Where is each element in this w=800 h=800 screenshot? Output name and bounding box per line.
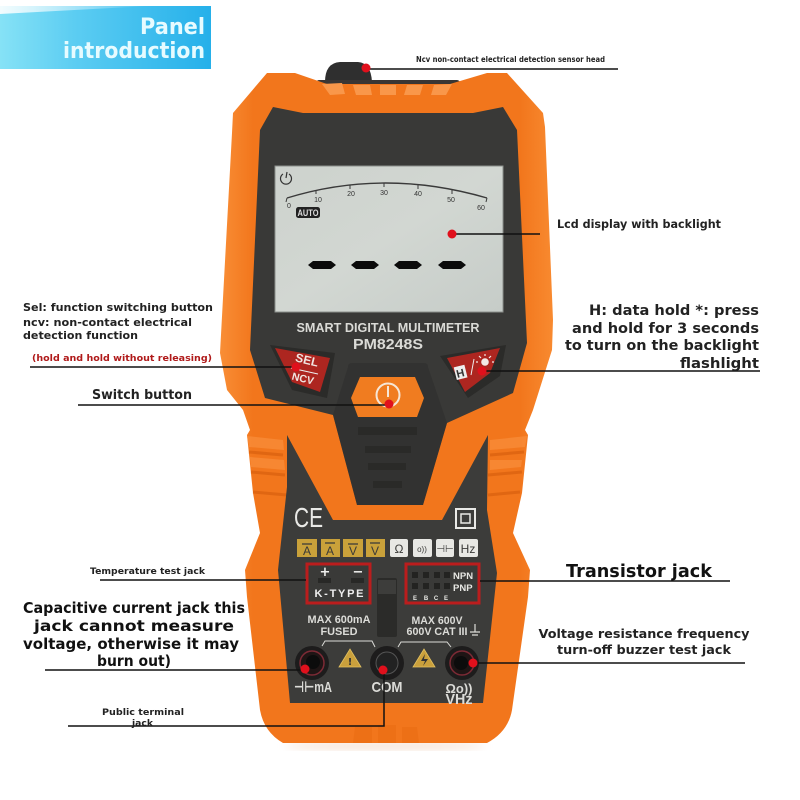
callout: switch button — [78, 388, 394, 408]
orange body — [220, 73, 553, 750]
transistor jack box: C — [434, 596, 439, 602]
K-TYPE jack box — [307, 564, 370, 603]
function icons row: V — [371, 544, 379, 558]
callout: H data hold — [478, 303, 760, 376]
AUTO badge: AUTO — [298, 208, 318, 218]
SEL NCV button: NCV — [291, 371, 315, 388]
warning triangles — [339, 649, 435, 668]
transistor jack box: NPN — [453, 571, 473, 582]
rating text — [308, 614, 468, 638]
callout: capacitive jack: jack cannot measure — [33, 617, 234, 635]
double insulation mark — [456, 509, 475, 528]
terminals — [295, 646, 479, 680]
power button — [333, 363, 447, 505]
callout: H data hold: to turn on the backlight — [565, 338, 759, 354]
K-TYPE jack box: + — [320, 565, 330, 580]
transistor jack box — [406, 564, 479, 603]
side grips — [249, 452, 524, 495]
analog scale: 20 — [347, 191, 355, 198]
rating text: 600V CAT III — [406, 626, 468, 638]
callout: SEL NCV: (hold and hold without releasing) — [32, 354, 212, 364]
K-TYPE jack box: K-TYPE — [314, 588, 364, 600]
callout: capacitive jack: voltage, otherwise it may — [23, 635, 239, 653]
transistor jack box: B — [424, 596, 429, 602]
rating text: FUSED — [320, 626, 358, 638]
transistor jack box: PNP — [453, 583, 473, 594]
callout: SEL NCV — [23, 301, 300, 372]
rating text: MAX 600V — [412, 615, 463, 627]
H flashlight button — [440, 345, 506, 398]
multimeter device — [220, 62, 553, 750]
LCD screen — [275, 166, 503, 312]
terminal labels: ⊣⊢mA — [294, 679, 332, 696]
callout: voltage jack — [468, 626, 750, 668]
bottom ridges — [353, 725, 419, 743]
callout: voltage jack: Voltage resistance frequency — [538, 626, 750, 641]
callout: SEL NCV: Sel: function switching button — [23, 301, 213, 314]
banner: Panel introduction — [0, 6, 211, 69]
callout: SEL NCV: detection function — [23, 329, 138, 342]
sensor head — [316, 62, 460, 90]
function icons row — [297, 539, 478, 558]
analog scale — [286, 183, 487, 212]
device title: SMART DIGITAL MULTIMETER — [296, 321, 480, 335]
banner: Panel introduction: Panel — [140, 15, 205, 40]
rating text: MAX 600mA — [308, 614, 371, 626]
callout: temperature jack: Temperature test jack — [90, 567, 206, 577]
callout: LCD: Lcd display with backlight — [557, 217, 721, 231]
function icons row: ⊣⊢ — [436, 544, 454, 555]
callout: capacitive jack: burn out) — [97, 652, 171, 670]
transistor jack box: E — [444, 596, 448, 602]
terminal labels: COM — [372, 679, 402, 696]
callout: H data hold: and hold for 3 seconds — [572, 321, 759, 337]
K-TYPE jack box: − — [353, 565, 363, 580]
callout: capacitive jack — [23, 599, 310, 674]
callout: public terminal: jack — [131, 719, 154, 729]
speaker slots — [358, 427, 417, 488]
analog scale: 40 — [414, 191, 422, 198]
icon: power symbol — [280, 172, 292, 184]
terminal labels: Ωo)) — [446, 681, 472, 696]
warning triangles: ! — [348, 657, 352, 668]
callout: public terminal: Public terminal — [102, 708, 184, 718]
CE mark: CE — [294, 502, 323, 533]
H flashlight button: H — [455, 367, 466, 381]
function icons row: Hz — [461, 542, 475, 556]
transistor jack box: E — [413, 596, 417, 602]
SEL NCV button: SEL — [294, 351, 320, 370]
device title — [296, 321, 480, 353]
callout: LCD — [448, 217, 721, 238]
upper dark faceplate — [250, 107, 527, 505]
callout: voltage jack: turn-off buzzer test jack — [557, 642, 732, 657]
analog scale: 0 — [287, 203, 291, 210]
terminal labels — [294, 679, 472, 708]
dashes — [308, 261, 466, 269]
callout: H data hold: flashlight — [680, 356, 759, 372]
function icons row: V — [349, 544, 357, 558]
slide cover — [377, 578, 397, 637]
callout: H data hold: H: data hold *: press — [589, 303, 759, 319]
callout: sensor head — [362, 55, 618, 72]
terminal labels: VHz — [446, 691, 472, 708]
function icons row: Ω — [395, 542, 404, 556]
callout: sensor head: Ncv non-contact electrical detection sensor head — [416, 55, 605, 64]
banner: Panel introduction: introduction — [63, 39, 205, 64]
lower dark faceplate — [278, 435, 497, 703]
SEL NCV button — [270, 345, 335, 398]
callout: public terminal — [68, 666, 388, 729]
callout: capacitive jack: Capacitive current jack this — [23, 599, 245, 617]
device title: PM8248S — [353, 336, 423, 353]
analog scale: 10 — [314, 197, 322, 204]
top ridges — [322, 83, 452, 95]
callout: transistor jack: Transistor jack — [566, 561, 713, 582]
callout: switch button: Switch button — [92, 388, 192, 403]
analog scale: 50 — [447, 197, 455, 204]
function icons row: o)) — [417, 545, 427, 554]
analog scale: 60 — [477, 205, 485, 212]
function icons row: A — [326, 544, 334, 558]
callout: SEL NCV: ncv: non-contact electrical — [23, 316, 192, 329]
function icons row: A — [303, 544, 311, 558]
analog scale: 30 — [380, 190, 388, 197]
